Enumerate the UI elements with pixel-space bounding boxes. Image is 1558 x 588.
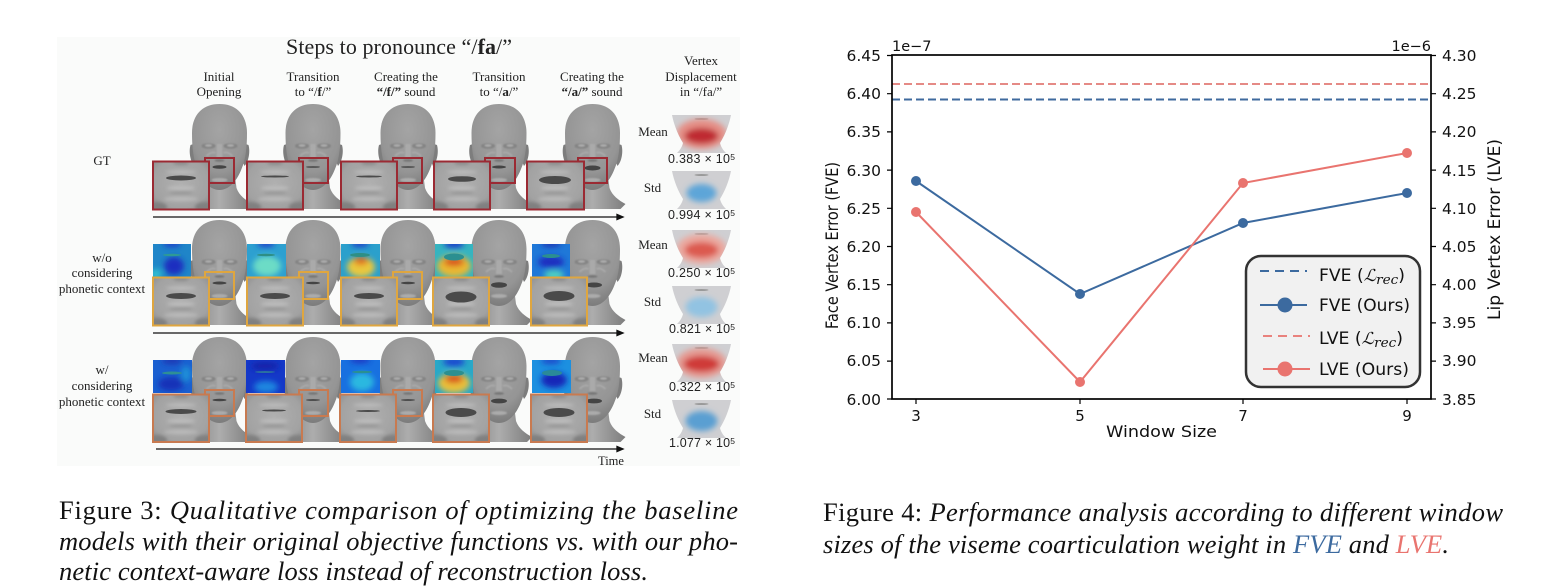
right scale note: 1e−6 — [1391, 39, 1431, 55]
vertex displacement column: 0.383 × 10 — [668, 152, 730, 166]
row label: without phonetic context: w/o — [92, 250, 112, 265]
heatmap r2c2 — [247, 244, 286, 276]
legend: ) — [1398, 266, 1405, 285]
dashed baseline lines — [892, 84, 1431, 100]
heatmap r2c3 — [341, 244, 380, 276]
vertex displacement column: Mean — [638, 124, 668, 139]
vertex displacement column: Std — [644, 180, 662, 195]
heatmap r3c1 — [153, 360, 192, 393]
right axis tick labels: 4.05 — [1442, 238, 1477, 256]
vertex displacement column: 1.077 × 10 — [669, 436, 730, 450]
left axis tick labels: 6.35 — [846, 123, 881, 141]
row label: without phonetic context: considering — [72, 265, 133, 280]
column headers: Initial — [203, 69, 235, 84]
x axis title: Window Size — [1106, 422, 1217, 441]
column headers: Creating the — [560, 69, 624, 84]
right axis tick labels: 4.30 — [1442, 47, 1477, 65]
arrow: without-context timeline — [153, 330, 623, 336]
x axis tick labels: 3 — [911, 407, 921, 425]
x axis tick labels: 7 — [1238, 407, 1248, 425]
left axis tick labels: 6.40 — [846, 85, 881, 103]
chart: window size performance — [823, 39, 1504, 441]
column headers — [197, 53, 737, 99]
left axis tick labels: 6.20 — [846, 238, 881, 256]
column headers: in “/fa/” — [680, 84, 722, 99]
heatmap r2c4 — [435, 244, 473, 276]
vertex displacement column: 0.994 × 10 — [668, 208, 730, 222]
left scale note: 1e−7 — [892, 39, 932, 55]
vertex displacement column: 5 — [730, 266, 735, 276]
left axis tick labels: 6.25 — [846, 200, 881, 218]
label: time: Time — [598, 454, 624, 468]
panel: qualitative comparison figure — [57, 34, 740, 468]
row label: with phonetic context: phonetic context — [59, 394, 146, 409]
right axis tick labels: 3.95 — [1442, 314, 1477, 332]
x axis tick labels: 5 — [1075, 407, 1085, 425]
heatmap r2c1 — [153, 244, 191, 276]
row label: with phonetic context: considering — [72, 378, 133, 393]
caption: figure 4 — [823, 497, 1503, 559]
right axis tick labels: 4.20 — [1442, 123, 1477, 141]
axes frame and ticks — [887, 55, 1436, 404]
arrow: with-context timeline — [156, 446, 623, 452]
column headers: Displacement — [665, 69, 737, 84]
caption: figure 3: Figure 3: Qualitative comparison of optimizing the baseline — [59, 495, 738, 525]
legend: FVE (ℒ — [1319, 266, 1376, 285]
caption: figure 3: netic context-aware loss instead of reconstruction loss. — [59, 556, 648, 586]
caption: figure 4: Figure 4: Performance analysis according to different window — [823, 497, 1503, 527]
right axis tick labels: 4.00 — [1442, 276, 1477, 294]
heatmap r3c2 — [246, 360, 285, 393]
legend: rec — [1374, 336, 1397, 351]
legend: rec — [1376, 273, 1399, 288]
heatmap r3c3 — [341, 360, 380, 393]
left axis tick labels: 6.00 — [846, 391, 881, 409]
column headers: Vertex — [684, 53, 718, 68]
vertex displacement column: 5 — [730, 322, 735, 332]
right axis tick labels: 4.10 — [1442, 200, 1477, 218]
legend: ) — [1396, 329, 1403, 348]
row: GT faces — [147, 104, 626, 212]
right axis title: Lip Vertex Error (LVE) — [1485, 139, 1504, 320]
vertex displacement column: 5 — [730, 436, 735, 446]
arrow: GT timeline — [153, 214, 623, 220]
x axis tick labels: 9 — [1402, 407, 1412, 425]
vertex displacement column: Mean — [638, 350, 668, 365]
legend: LVE (ℒ — [1319, 329, 1374, 348]
column headers: to “/a/” — [480, 84, 519, 99]
heatmap r3c5 — [532, 360, 571, 393]
row label: with phonetic context: w/ — [96, 362, 108, 377]
right axis tick labels: 4.15 — [1442, 162, 1477, 180]
vertex displacement column: 5 — [730, 380, 735, 390]
vertex displacement column: 5 — [730, 208, 735, 218]
column headers: “/a/” sound — [561, 84, 623, 99]
right axis tick labels: 4.25 — [1442, 85, 1477, 103]
left axis tick labels — [846, 47, 881, 409]
heading: steps to pronounce: Steps to pronounce “/fa/” — [286, 34, 512, 59]
column headers: Transition — [473, 69, 526, 84]
column headers: Creating the — [374, 69, 438, 84]
vertex displacement column — [638, 115, 735, 450]
right axis tick labels: 3.90 — [1442, 352, 1477, 370]
vertex displacement column: Mean — [638, 237, 668, 252]
legend: FVE (Ours) — [1319, 296, 1410, 315]
legend — [1246, 256, 1420, 387]
caption: figure 4: sizes of the viseme coarticulation weight in FVE and LVE. — [823, 529, 1449, 559]
caption: figure 3: models with their original objective functions vs. with our pho- — [59, 526, 738, 556]
vertex displacement column: 0.821 × 10 — [669, 322, 730, 336]
series: FVE ours — [911, 176, 1412, 299]
row label: without phonetic context: phonetic context — [59, 281, 146, 296]
vertex displacement column: 0.322 × 10 — [669, 380, 730, 394]
vertex displacement column: Std — [644, 294, 662, 309]
right axis tick labels — [1442, 47, 1477, 409]
left axis tick labels: 6.15 — [846, 276, 881, 294]
caption: figure 3 — [59, 495, 738, 586]
row: without phonetic context — [147, 220, 626, 328]
column headers: Transition — [287, 69, 340, 84]
left axis tick labels: 6.05 — [846, 352, 881, 370]
vertex displacement column: 5 — [730, 152, 735, 162]
column headers: Opening — [197, 84, 242, 99]
left axis tick labels: 6.45 — [846, 47, 881, 65]
row: with phonetic context — [147, 337, 626, 445]
right axis tick labels: 3.85 — [1442, 391, 1477, 409]
vertex displacement column: Std — [644, 406, 662, 421]
left axis title: Face Vertex Error (FVE) — [823, 162, 842, 329]
vertex displacement column: 0.250 × 10 — [668, 266, 730, 280]
legend: LVE (Ours) — [1319, 360, 1409, 379]
column headers: “/f/” sound — [377, 84, 436, 99]
row label: GT: GT — [93, 153, 111, 168]
heatmap r3c4 — [435, 360, 473, 393]
left axis tick labels: 6.10 — [846, 314, 881, 332]
series: LVE ours — [911, 148, 1412, 387]
column headers: to “/f/” — [295, 84, 331, 99]
x axis tick labels — [911, 407, 1412, 425]
heatmap r2c5 — [532, 244, 570, 276]
left axis tick labels: 6.30 — [846, 162, 881, 180]
